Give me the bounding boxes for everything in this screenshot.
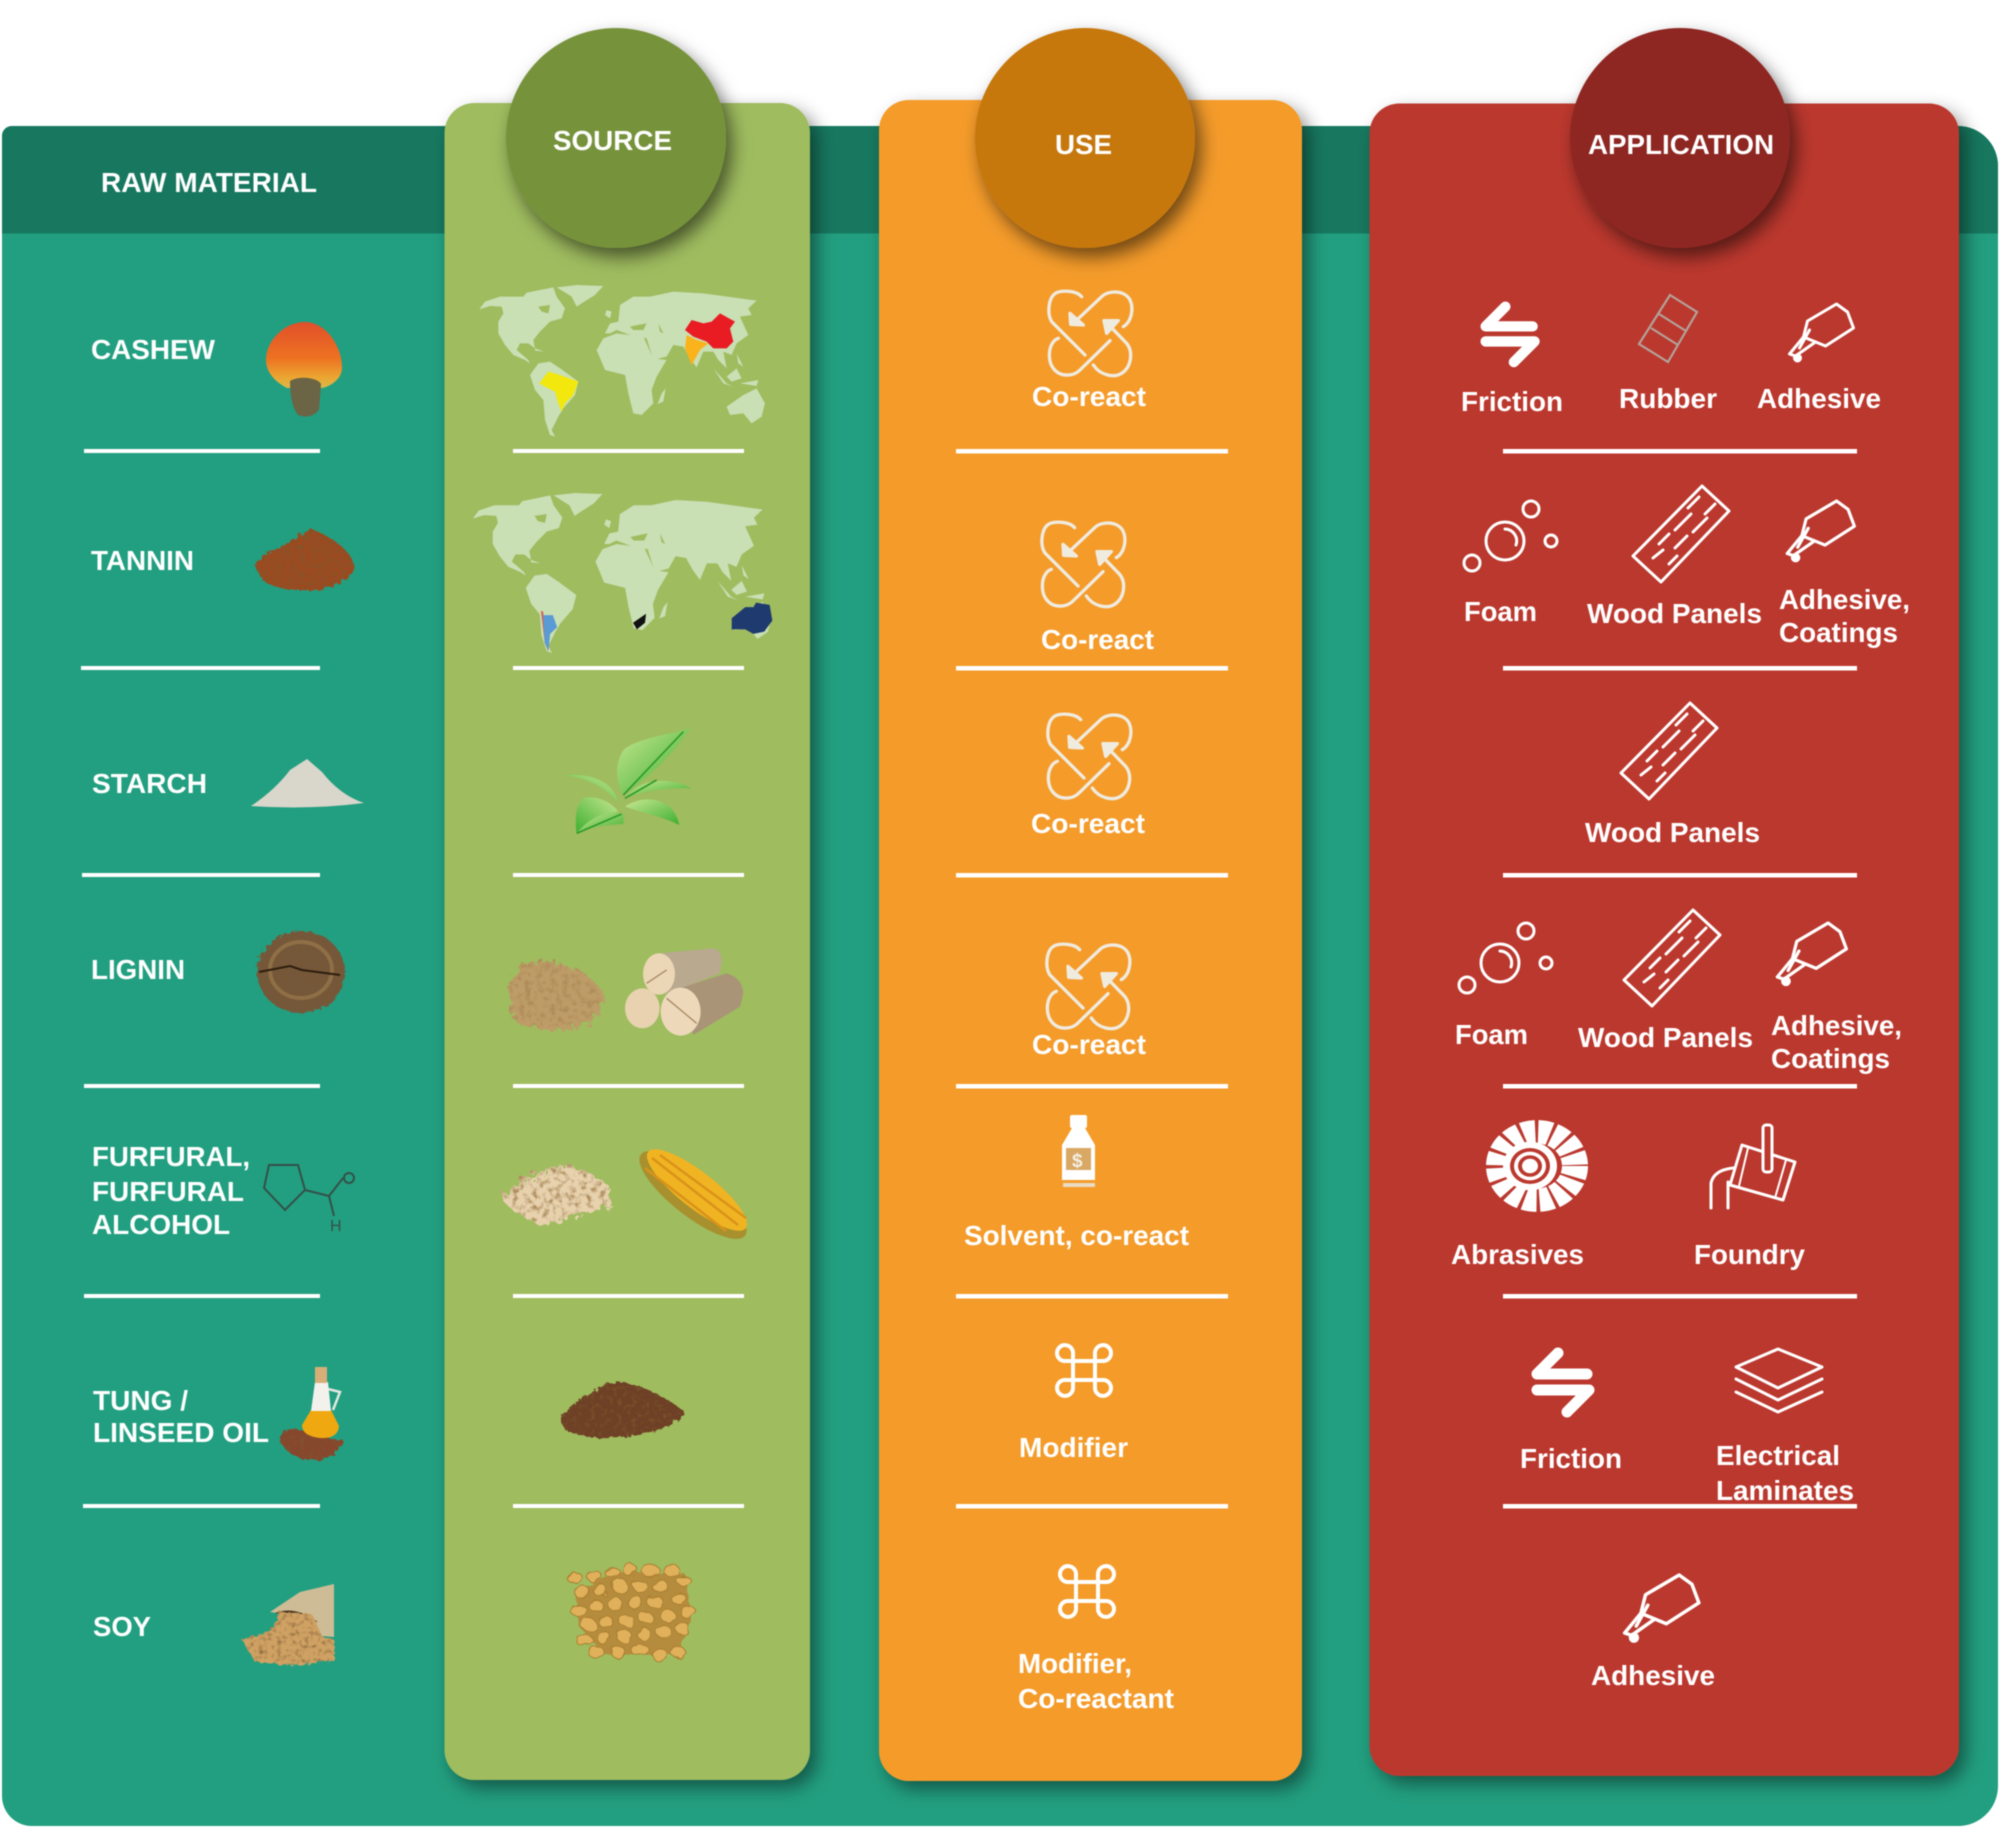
row: modifier, co-reactant: Co-reactant: [1018, 1683, 1174, 1714]
icon: solvent bottle: [1062, 1115, 1095, 1187]
header circle: use: USE: [1055, 129, 1112, 160]
row: starch: STARCH: [92, 768, 207, 799]
icon: abrasive wheel: [1499, 1132, 1575, 1200]
row: lignin: [91, 931, 345, 1013]
row: friction, rubber, adhesive: Adhesive: [1757, 383, 1881, 414]
image: wood chips and corn: [500, 1138, 758, 1252]
panel: application: [1370, 28, 1959, 1776]
row: tannin: TANNIN: [91, 545, 194, 576]
row: adhesive: Adhesive: [1591, 1660, 1715, 1691]
row: friction, electrical laminates: Laminates: [1716, 1475, 1854, 1506]
header circle: source: SOURCE: [553, 125, 672, 156]
header circle: application: [1570, 28, 1790, 248]
header circle: application: APPLICATION: [1588, 129, 1774, 160]
image: green leaves: [563, 728, 692, 833]
row: friction, rubber, adhesive: [1461, 295, 1881, 417]
row: abrasives, foundry: Abrasives: [1451, 1239, 1584, 1270]
row: tung / linseed oil: [93, 1367, 343, 1460]
row: starch: [92, 759, 364, 807]
map: tannin sources: [473, 493, 772, 653]
row: co-react 2: Co-react: [1041, 624, 1154, 655]
row: friction, rubber, adhesive: Rubber: [1619, 383, 1717, 414]
row: wood panels: [1585, 703, 1760, 848]
row: modifier, co-reactant: [1018, 1566, 1174, 1714]
icon: oil bottle and seeds: [279, 1367, 343, 1460]
row: wood panels: Wood Panels: [1585, 817, 1760, 848]
header band: [2, 126, 1998, 234]
icon: laminate layers: [1736, 1349, 1822, 1412]
row: cashew: [91, 322, 342, 417]
row: abrasives, foundry: [1451, 1125, 1805, 1270]
panel: source: [444, 28, 810, 1780]
row: cashew: CASHEW: [91, 334, 216, 365]
row: foam, wood panels, adhesive coatings 2: Wood Panels: [1578, 1022, 1753, 1053]
row: furfural: [92, 1141, 354, 1240]
icon: starch powder: [251, 759, 364, 807]
row: co-react 3: Co-react: [1031, 808, 1145, 839]
row: tung / linseed oil: LINSEED OIL: [93, 1417, 269, 1448]
icon: tree stump: [257, 931, 345, 1013]
row: foam, wood panels, adhesive coatings 2: Adhesive,: [1771, 1010, 1902, 1041]
icon: furfural molecule: H: [330, 1218, 342, 1235]
row: friction, electrical laminates: Electrical: [1716, 1440, 1840, 1471]
row: tung / linseed oil: TUNG /: [93, 1385, 188, 1416]
row: soy: SOY: [93, 1611, 151, 1642]
row: furfural: FURFURAL: [92, 1176, 244, 1207]
row: friction, electrical laminates: [1520, 1349, 1854, 1506]
row: co-react 4: [1032, 944, 1146, 1060]
row: co-react 1: [1032, 291, 1146, 412]
header circle: source: [506, 28, 726, 248]
row: co-react 3: [1031, 714, 1145, 839]
row: co-react 1: Co-react: [1032, 381, 1146, 412]
icon: foundry ladle: [1711, 1125, 1795, 1208]
icon: solvent bottle: $: [1072, 1151, 1083, 1172]
row: foam, wood panels, adhesive coatings 2: [1455, 910, 1902, 1074]
row: modifier: Modifier: [1019, 1432, 1128, 1463]
panel: use: [879, 28, 1302, 1781]
icon: cashew fruit: [266, 322, 342, 417]
row: friction, rubber, adhesive: Friction: [1461, 386, 1563, 417]
row: solvent: Solvent, co-react: [964, 1220, 1189, 1251]
image: soybeans: [567, 1564, 696, 1661]
image: sawdust and logs: [508, 948, 743, 1036]
icon: rubber: [1639, 295, 1697, 362]
row: furfural: FURFURAL,: [92, 1141, 250, 1172]
row: foam, wood panels, adhesive coatings: Wood Panels: [1587, 598, 1762, 629]
row: co-react 2: [1041, 522, 1154, 655]
icon: furfural molecule: [264, 1165, 354, 1235]
row: furfural: ALCOHOL: [92, 1209, 230, 1240]
row: adhesive: [1591, 1575, 1715, 1691]
row: foam, wood panels, adhesive coatings: Foam: [1464, 596, 1537, 627]
row: modifier, co-reactant: Modifier,: [1018, 1648, 1132, 1679]
row: friction, electrical laminates: Friction: [1520, 1443, 1622, 1474]
icon: soy sack: [242, 1584, 334, 1665]
row: modifier: [1019, 1345, 1128, 1463]
row: foam, wood panels, adhesive coatings: [1464, 486, 1910, 648]
row: foam, wood panels, adhesive coatings 2: Foam: [1455, 1019, 1528, 1050]
heading: raw material: RAW MATERIAL: [101, 167, 317, 198]
row: tannin: [91, 528, 355, 590]
row: foam, wood panels, adhesive coatings: Adhesive,: [1779, 584, 1910, 615]
header circle: use: [975, 28, 1195, 248]
row: foam, wood panels, adhesive coatings 2: Coatings: [1771, 1043, 1890, 1074]
row: co-react 4: Co-react: [1032, 1029, 1146, 1060]
row: soy: [93, 1584, 334, 1665]
map: cashew sources: [479, 285, 765, 437]
row: abrasives, foundry: Foundry: [1694, 1239, 1805, 1270]
icon: tannin powder: [255, 528, 355, 590]
row: lignin: LIGNIN: [91, 954, 185, 985]
image: linseed pile: [560, 1381, 685, 1438]
row: foam, wood panels, adhesive coatings: Coatings: [1779, 617, 1898, 648]
row: solvent: [964, 1115, 1189, 1251]
